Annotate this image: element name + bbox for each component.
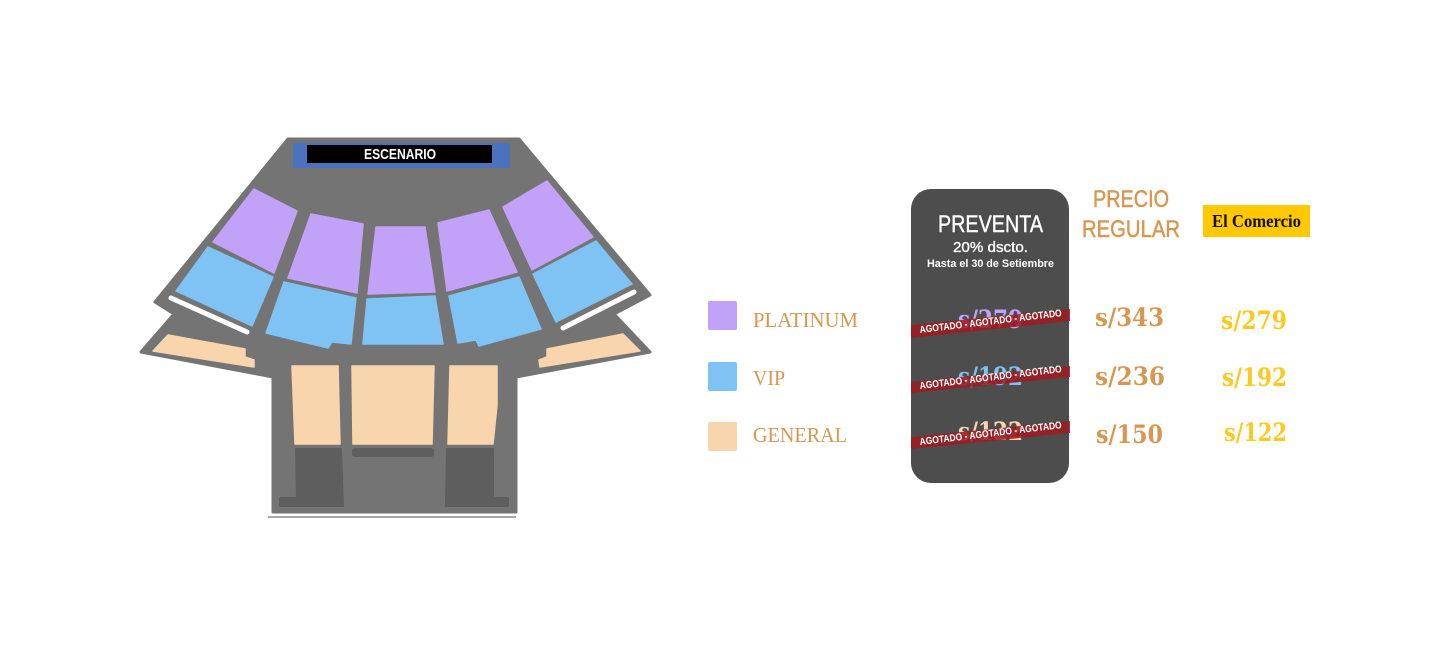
legend: vip: VIP: [753, 366, 785, 390]
stage: [293, 143, 510, 168]
regular price heading: PRECIO: [1093, 186, 1169, 213]
legend: platinum: PLATINUM: [753, 308, 858, 332]
regular price heading: REGULAR: [1082, 216, 1180, 243]
regular price platinum: s/343: [1095, 303, 1164, 332]
presale price general: s/122: [958, 417, 1023, 446]
el comercio logo: [1203, 205, 1310, 237]
vip sections: [176, 241, 632, 348]
legend: general: [708, 422, 847, 451]
dark sections: [280, 448, 508, 506]
platinum sections: [213, 181, 593, 294]
legend: vip: [708, 362, 785, 391]
sold out band 2: AGOTADO - AGOTADO - AGOTADO: [919, 364, 1063, 392]
legend: [708, 301, 858, 451]
regular price heading: [1082, 186, 1180, 243]
legend: general: GENERAL: [753, 423, 847, 447]
el comercio price platinum: s/279: [1221, 306, 1287, 335]
sold out band 3: AGOTADO - AGOTADO - AGOTADO: [919, 420, 1063, 448]
el comercio price general: s/122: [1224, 418, 1287, 447]
seating map: [141, 139, 650, 517]
presale price vip: s/192: [958, 362, 1023, 391]
column: regular price: [1082, 186, 1180, 449]
deadline text: Hasta el 30 de Setiembre: [927, 258, 1054, 270]
sold out band 1: AGOTADO - AGOTADO - AGOTADO: [919, 308, 1063, 336]
discount text: 20% dscto.: [953, 239, 1028, 256]
panel: preventa: [911, 189, 1070, 483]
regular price general: s/150: [1096, 420, 1163, 449]
regular price vip: s/236: [1095, 362, 1165, 391]
general sections: [153, 334, 640, 444]
white side bars: [171, 292, 634, 332]
column: el comercio price: [1203, 205, 1310, 447]
el comercio price vip: s/192: [1222, 363, 1287, 392]
presale price platinum: s/279: [958, 305, 1023, 334]
el comercio logo: El Comercio: [1212, 211, 1301, 231]
preventa heading: PREVENTA: [938, 211, 1043, 238]
legend: platinum: [708, 301, 858, 332]
venue floor: [141, 139, 650, 517]
stage: ESCENARIO: [364, 146, 436, 163]
